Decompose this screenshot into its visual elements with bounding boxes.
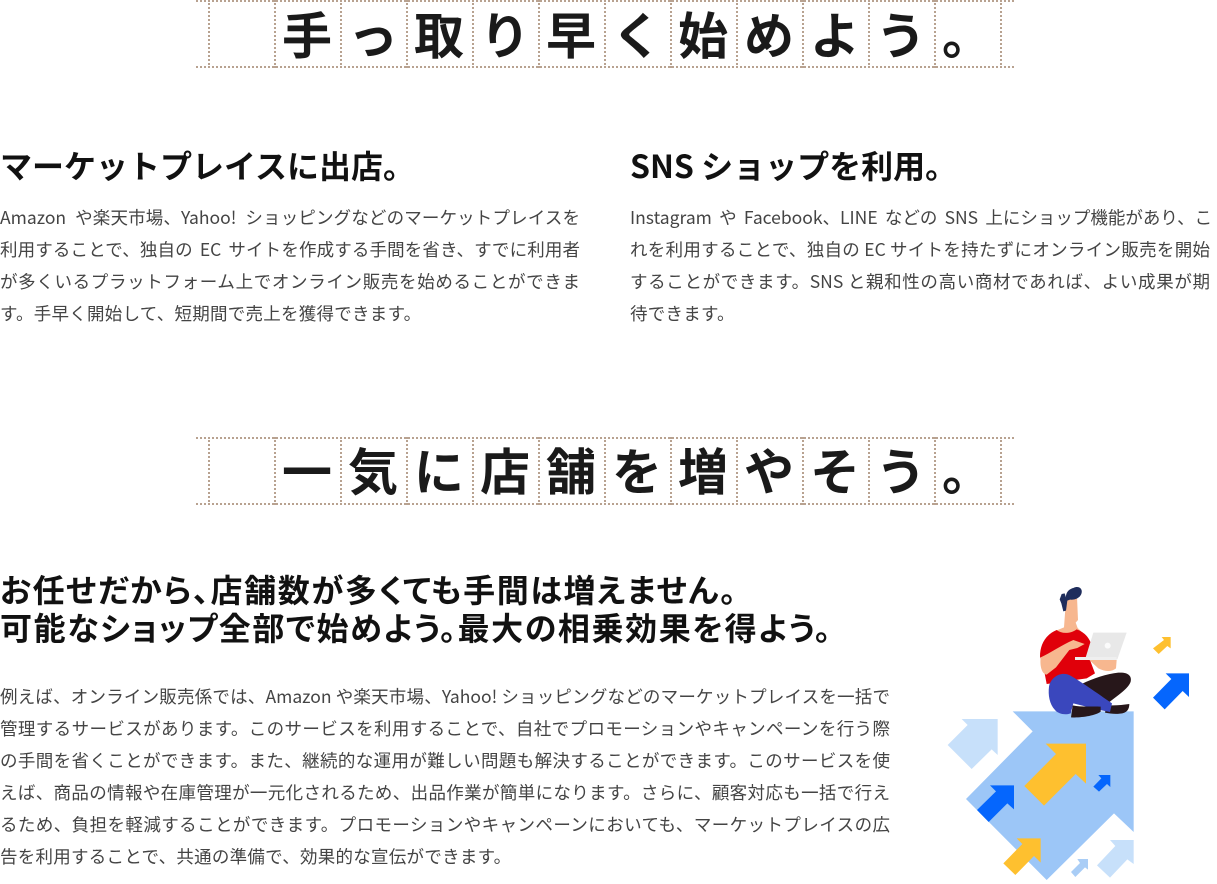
title: 一気に店舗を増やそう: う bbox=[876, 433, 926, 505]
icon: blue arrow bbox=[977, 785, 1014, 822]
icon: pale left arrow bbox=[948, 719, 998, 769]
icon: large light blue arrow bbox=[966, 711, 1134, 880]
text block: marketplace: が多くいるプラットフォーム上でオンライン販売を始めることができま bbox=[0, 269, 580, 294]
icon: top right yellow arrow bbox=[1153, 637, 1171, 654]
text block: example: 例えば、オンライン販売係では、Amazon や楽天市場、Yahoo! ショッピングなどのマーケットプレイスを一括で bbox=[0, 684, 890, 709]
text block: marketplace bbox=[0, 205, 580, 326]
icon: small pale arrow bbox=[1071, 859, 1088, 877]
title: 一気に店舗を増やそう: や bbox=[744, 433, 794, 505]
title: 一気に店舗を増やそう: 。 bbox=[942, 433, 992, 505]
text block: SNS shop: れを利用することで、独自の EC サイトを持たずにオンライン販売を開始 bbox=[630, 237, 1210, 262]
text block: example bbox=[0, 684, 890, 869]
figure: man bbox=[1040, 587, 1131, 717]
heading: SNSショップを利用: SNS ショップを利用。 bbox=[630, 142, 957, 188]
title: 一気に店舗を増やそう: 一 bbox=[282, 433, 332, 505]
text block: example: 告を利用することで、共通の準備で、効果的な宣伝ができます。 bbox=[0, 844, 511, 869]
heading: お任せだから bbox=[0, 566, 832, 650]
icon: large yellow arrow bbox=[1024, 744, 1086, 806]
title: 手っ取り早く始めよう bbox=[196, 0, 1014, 69]
title: 一気に店舗を増やそう: 舗 bbox=[546, 433, 596, 505]
title: 一気に店舗を増やそう bbox=[196, 433, 1014, 505]
text block: marketplace: 利用することで、独自の EC サイトを作成する手間を省き、すでに利用者 bbox=[0, 237, 580, 262]
heading: マーケットプレイスに出店: マーケットプレイスに出店。 bbox=[0, 142, 415, 188]
heading: お任せだから: 可能なショップ全部で始めよう。最大の相乗効果を得よう。 bbox=[0, 604, 832, 650]
text block: SNS shop bbox=[630, 205, 1212, 326]
text block: marketplace: Amazon や楽天市場、Yahoo! ショッピングなどのマーケットプレイスを bbox=[0, 205, 580, 230]
text block: marketplace: す。手早く開始して、短期間で売上を獲得できます。 bbox=[0, 301, 421, 326]
title: 一気に店舗を増やそう: そ bbox=[810, 433, 860, 505]
illustration: man with laptop on arrows bbox=[948, 587, 1189, 880]
title: 一気に店舗を増やそう: を bbox=[612, 433, 662, 505]
title: 一気に店舗を増やそう: 増 bbox=[678, 433, 728, 505]
icon: small blue arrow bbox=[1093, 775, 1110, 792]
text block: SNS shop: することができます。SNS と親和性の高い商材であれば、よい成果が期 bbox=[630, 269, 1210, 294]
text block: example: 管理するサービスがあります。このサービスを利用することで、自社でプロモーションやキャンペーンを行う際 bbox=[0, 716, 890, 741]
text block: SNS shop: 待できます。 bbox=[630, 301, 735, 326]
icon: pale lower right arrow bbox=[1097, 840, 1134, 878]
icon: right blue arrow bbox=[1153, 673, 1189, 709]
text block: SNS shop: Instagram や Facebook、LINE などの SNS 上にショップ機能があり、こ bbox=[630, 205, 1212, 230]
title: 一気に店舗を増やそう: 気 bbox=[348, 433, 398, 505]
text block: example: るため、負担を軽減することができます。プロモーションやキャンペーンにおいても、マーケットプレイスの広 bbox=[0, 812, 890, 837]
text block: example: の手間を省くことができます。また、継続的な運用が難しい問題も解決することができます。このサービスを使 bbox=[0, 748, 890, 773]
heading: お任せだから: お任せだから、店舗数が多くても手間は増えません。 bbox=[0, 566, 738, 612]
text block: example: えば、商品の情報や在庫管理が一元化されるため、出品作業が簡単になります。さらに、顧客対応も一括で行え bbox=[0, 780, 890, 805]
title: 一気に店舗を増やそう: に bbox=[414, 433, 464, 505]
title: 一気に店舗を増やそう: 店 bbox=[480, 433, 530, 505]
icon: lower yellow arrow bbox=[1003, 838, 1041, 875]
